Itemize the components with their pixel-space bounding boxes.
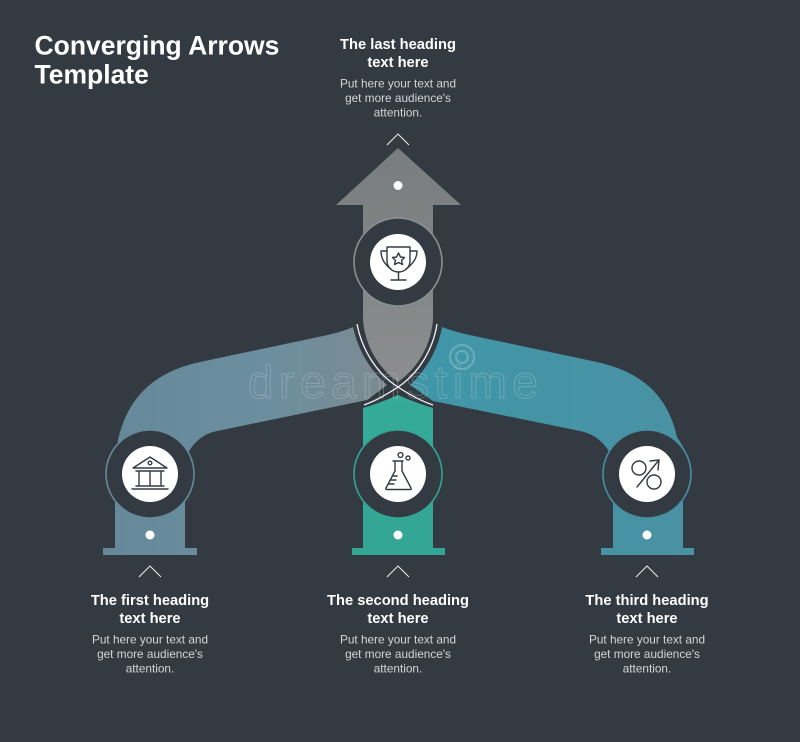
- arrow: center: [352, 395, 445, 555]
- text: third heading: attention.: [623, 662, 671, 676]
- text: second heading: attention.: [374, 662, 422, 676]
- node: percent: [603, 430, 691, 518]
- text: first heading: Put here your text and: [92, 632, 208, 646]
- text: second heading: Put here your text and: [340, 632, 456, 646]
- icon: flask: [386, 453, 411, 490]
- text: second heading: The second heading: [327, 593, 469, 609]
- text: third heading: get more audience's: [594, 647, 700, 661]
- watermark: dreamstime: [248, 356, 538, 408]
- text: last heading: The last heading: [340, 37, 456, 53]
- crossing lines: [357, 324, 437, 405]
- text: last heading: get more audience's: [345, 91, 451, 105]
- text: third heading: The third heading: [585, 593, 709, 609]
- arrow: right: [410, 327, 694, 555]
- text: third heading: text here: [616, 611, 678, 627]
- node: trophy: [354, 218, 442, 306]
- text: last heading: Put here your text and: [340, 76, 456, 90]
- arrow: top: [336, 148, 461, 382]
- title: Converging Arrows: [34, 30, 279, 60]
- text: second heading: get more audience's: [345, 647, 451, 661]
- node: bank: [106, 430, 194, 518]
- text: last heading: text here: [367, 55, 429, 71]
- text: first heading: text here: [119, 611, 181, 627]
- icon: bank: [132, 457, 168, 489]
- node: flask: [354, 430, 442, 518]
- arrow: left: [103, 327, 387, 555]
- icon: trophy: [381, 247, 417, 280]
- icon: percent arrow: [632, 460, 661, 489]
- text: first heading: [91, 593, 209, 676]
- text: last heading: [340, 37, 456, 120]
- dots: [146, 181, 652, 540]
- text: first heading: get more audience's: [97, 647, 203, 661]
- text: first heading: attention.: [126, 662, 174, 676]
- text: third heading: [585, 593, 709, 676]
- title: Template: [34, 60, 149, 90]
- text: third heading: Put here your text and: [589, 632, 705, 646]
- text: last heading: attention.: [374, 106, 422, 120]
- text: second heading: text here: [367, 611, 429, 627]
- text: second heading: [327, 593, 469, 676]
- title: [34, 30, 279, 90]
- chevrons: [139, 134, 658, 577]
- text: first heading: The first heading: [91, 593, 209, 609]
